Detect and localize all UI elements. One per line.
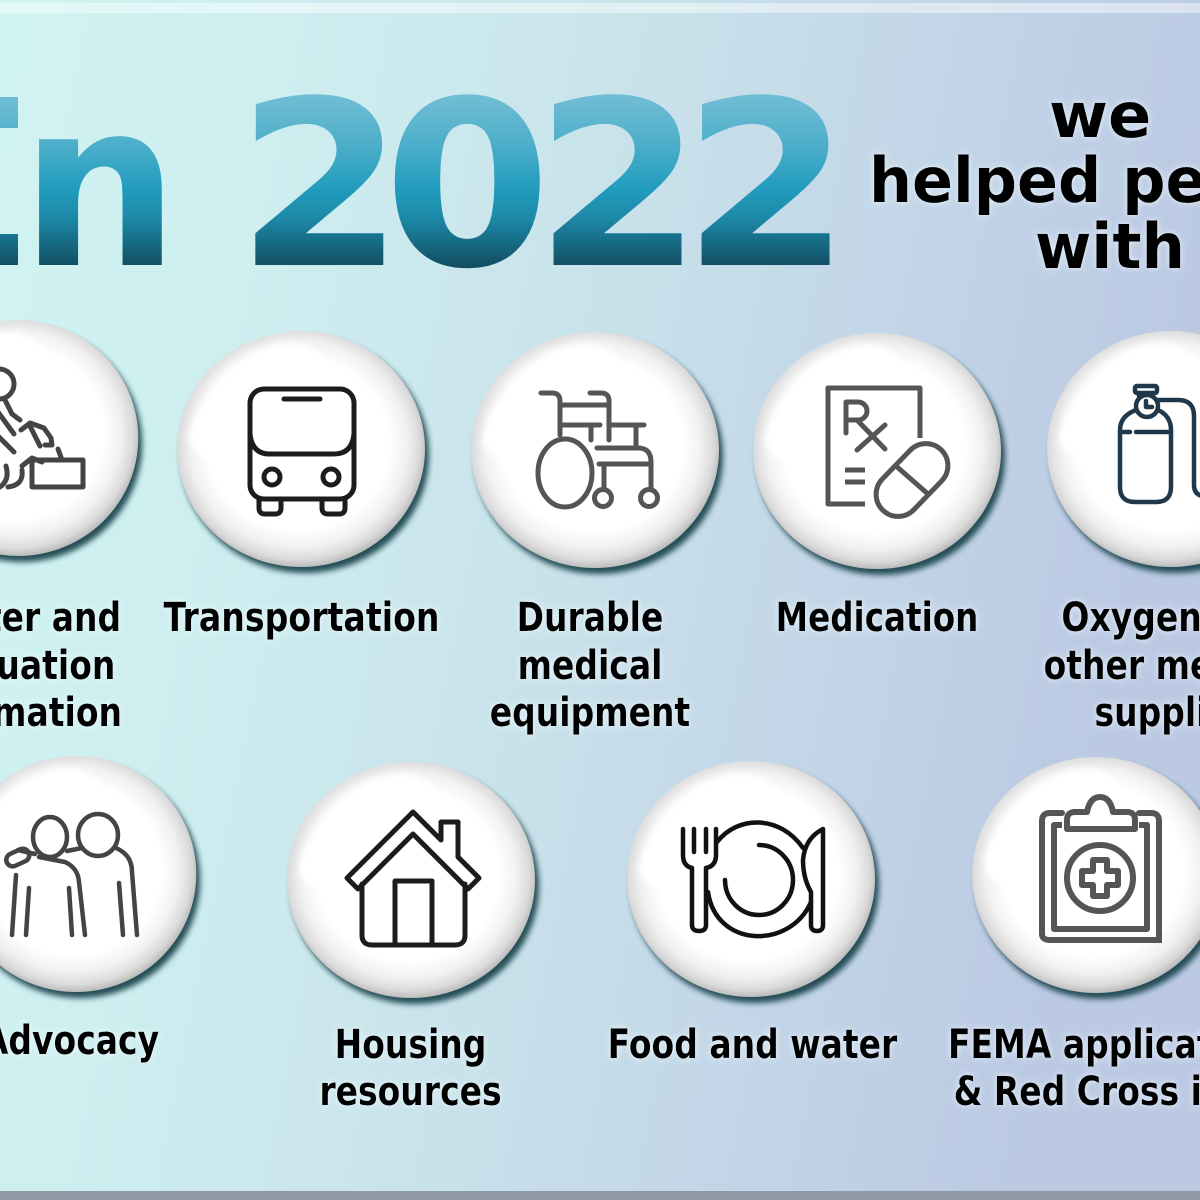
label: Durable (517, 594, 663, 641)
panel: durable medical equipment (471, 332, 723, 736)
heading: we helped people with: with (1035, 211, 1185, 283)
panel: food and water (608, 761, 897, 1068)
label: Transportation (163, 594, 440, 641)
bubble (471, 332, 723, 574)
icon: prescription and pill (828, 388, 957, 525)
top edge strip (0, 3, 1200, 13)
bottom edge strip (0, 1191, 1200, 1200)
icon: plate with fork and knife (683, 822, 823, 936)
panel: medication (753, 333, 1005, 641)
panel: oxygen and other medical supplies (1044, 331, 1200, 736)
bubble (1047, 331, 1200, 573)
bubble (287, 762, 539, 1004)
bubble (0, 756, 200, 998)
heading: we helped people with (869, 80, 1200, 283)
label: Food and water (608, 1021, 897, 1068)
label: equipment (490, 689, 690, 736)
label (319, 1021, 502, 1115)
icon: two people embracing (4, 814, 137, 935)
label: medical (518, 642, 662, 689)
label (490, 594, 690, 736)
label (1044, 594, 1200, 736)
label: resources (319, 1068, 502, 1115)
panel: shelter and evacuation information (0, 320, 142, 736)
bubble (0, 320, 142, 562)
heading: we helped people with: we (1049, 80, 1151, 152)
title: In 2022: n (20, 53, 179, 320)
icon: oxygen tank (1120, 386, 1200, 502)
label (948, 1021, 1200, 1115)
panel: transportation (163, 331, 440, 641)
label: Housing (335, 1021, 486, 1068)
icon: bus (250, 389, 354, 514)
bubble (753, 333, 1005, 575)
panel: advocacy (0, 756, 200, 1064)
panel: FEMA application and Red Cross info (948, 757, 1200, 1115)
icon: clipboard with medical cross (1042, 797, 1159, 940)
label (0, 594, 122, 736)
icon: wheelchair (538, 393, 658, 507)
bubble (972, 757, 1200, 999)
icon: house (347, 812, 479, 945)
title: In 2022: 2022 (236, 51, 851, 320)
bubble (627, 761, 879, 1003)
panel: housing resources (287, 762, 539, 1115)
label: Medication (776, 594, 978, 641)
bubble (177, 331, 429, 573)
icon: person packing box (0, 369, 83, 487)
